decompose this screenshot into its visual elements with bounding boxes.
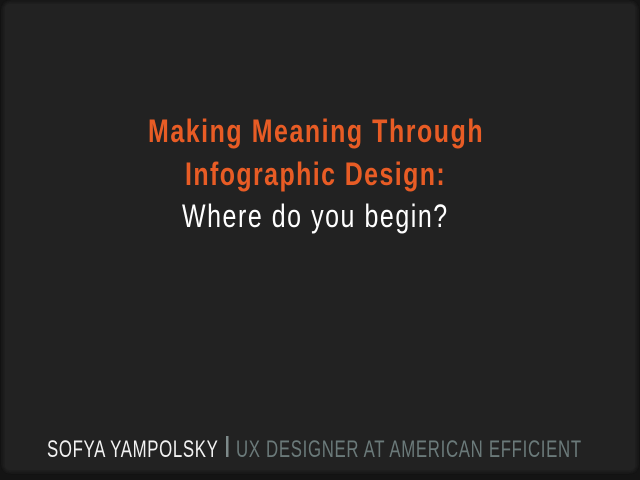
presenter role: UX DESIGNER AT AMERICAN EFFICIENT [236, 436, 581, 463]
subtitle: Where do you begin? [182, 199, 447, 235]
title line 2: Infographic Design: [185, 157, 445, 193]
divider bar [226, 436, 228, 457]
title line 1: Making Meaning Through [148, 114, 483, 150]
footer credit [47, 436, 581, 463]
presenter name: SOFYA YAMPOLSKY [47, 436, 218, 463]
title [148, 114, 483, 235]
